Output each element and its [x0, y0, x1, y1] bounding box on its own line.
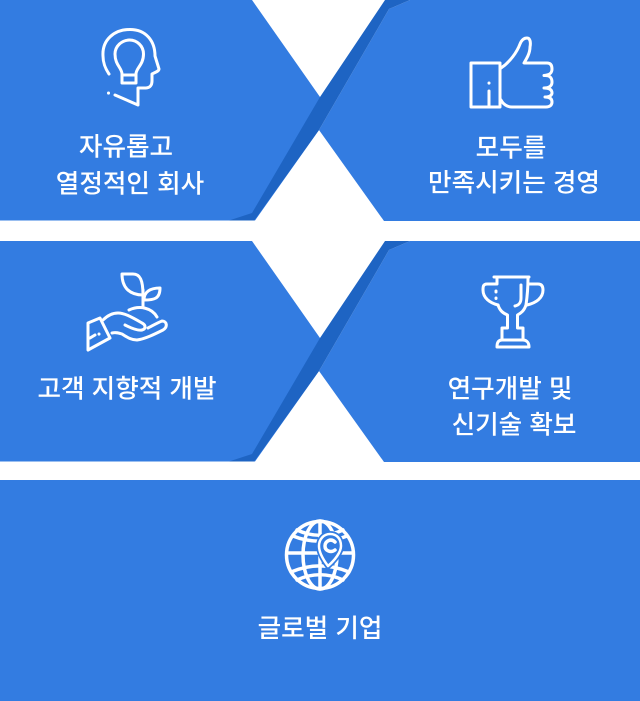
panel: global company [0, 480, 640, 701]
heading: research and technology [448, 374, 576, 440]
heading: free and passionate company: 자유롭고 [79, 132, 173, 162]
panel: row 1 chevrons [0, 0, 640, 221]
heading: management that satisfies everyone: 모두를 [476, 134, 546, 162]
icon: trophy [483, 277, 543, 347]
icon: thumbs up [471, 38, 552, 107]
icon: head with light bulb [103, 30, 159, 105]
heading: global company: 글로벌 기업 [258, 614, 382, 643]
heading: research and technology: 신기술 확보 [452, 410, 576, 440]
heading: management that satisfies everyone: 만족시키는 경영 [428, 168, 600, 198]
panel: row 2 chevrons [0, 241, 640, 462]
heading: management that satisfies everyone [428, 134, 600, 198]
heading: research and technology: 연구개발 및 [448, 374, 572, 404]
heading: customer-oriented development: 고객 지향적 개발 [37, 374, 217, 404]
heading: free and passionate company [56, 132, 204, 198]
icon: hand holding sprout [88, 274, 166, 350]
icon: globe with pin [286, 521, 354, 589]
heading: free and passionate company: 열정적인 회사 [56, 170, 204, 198]
